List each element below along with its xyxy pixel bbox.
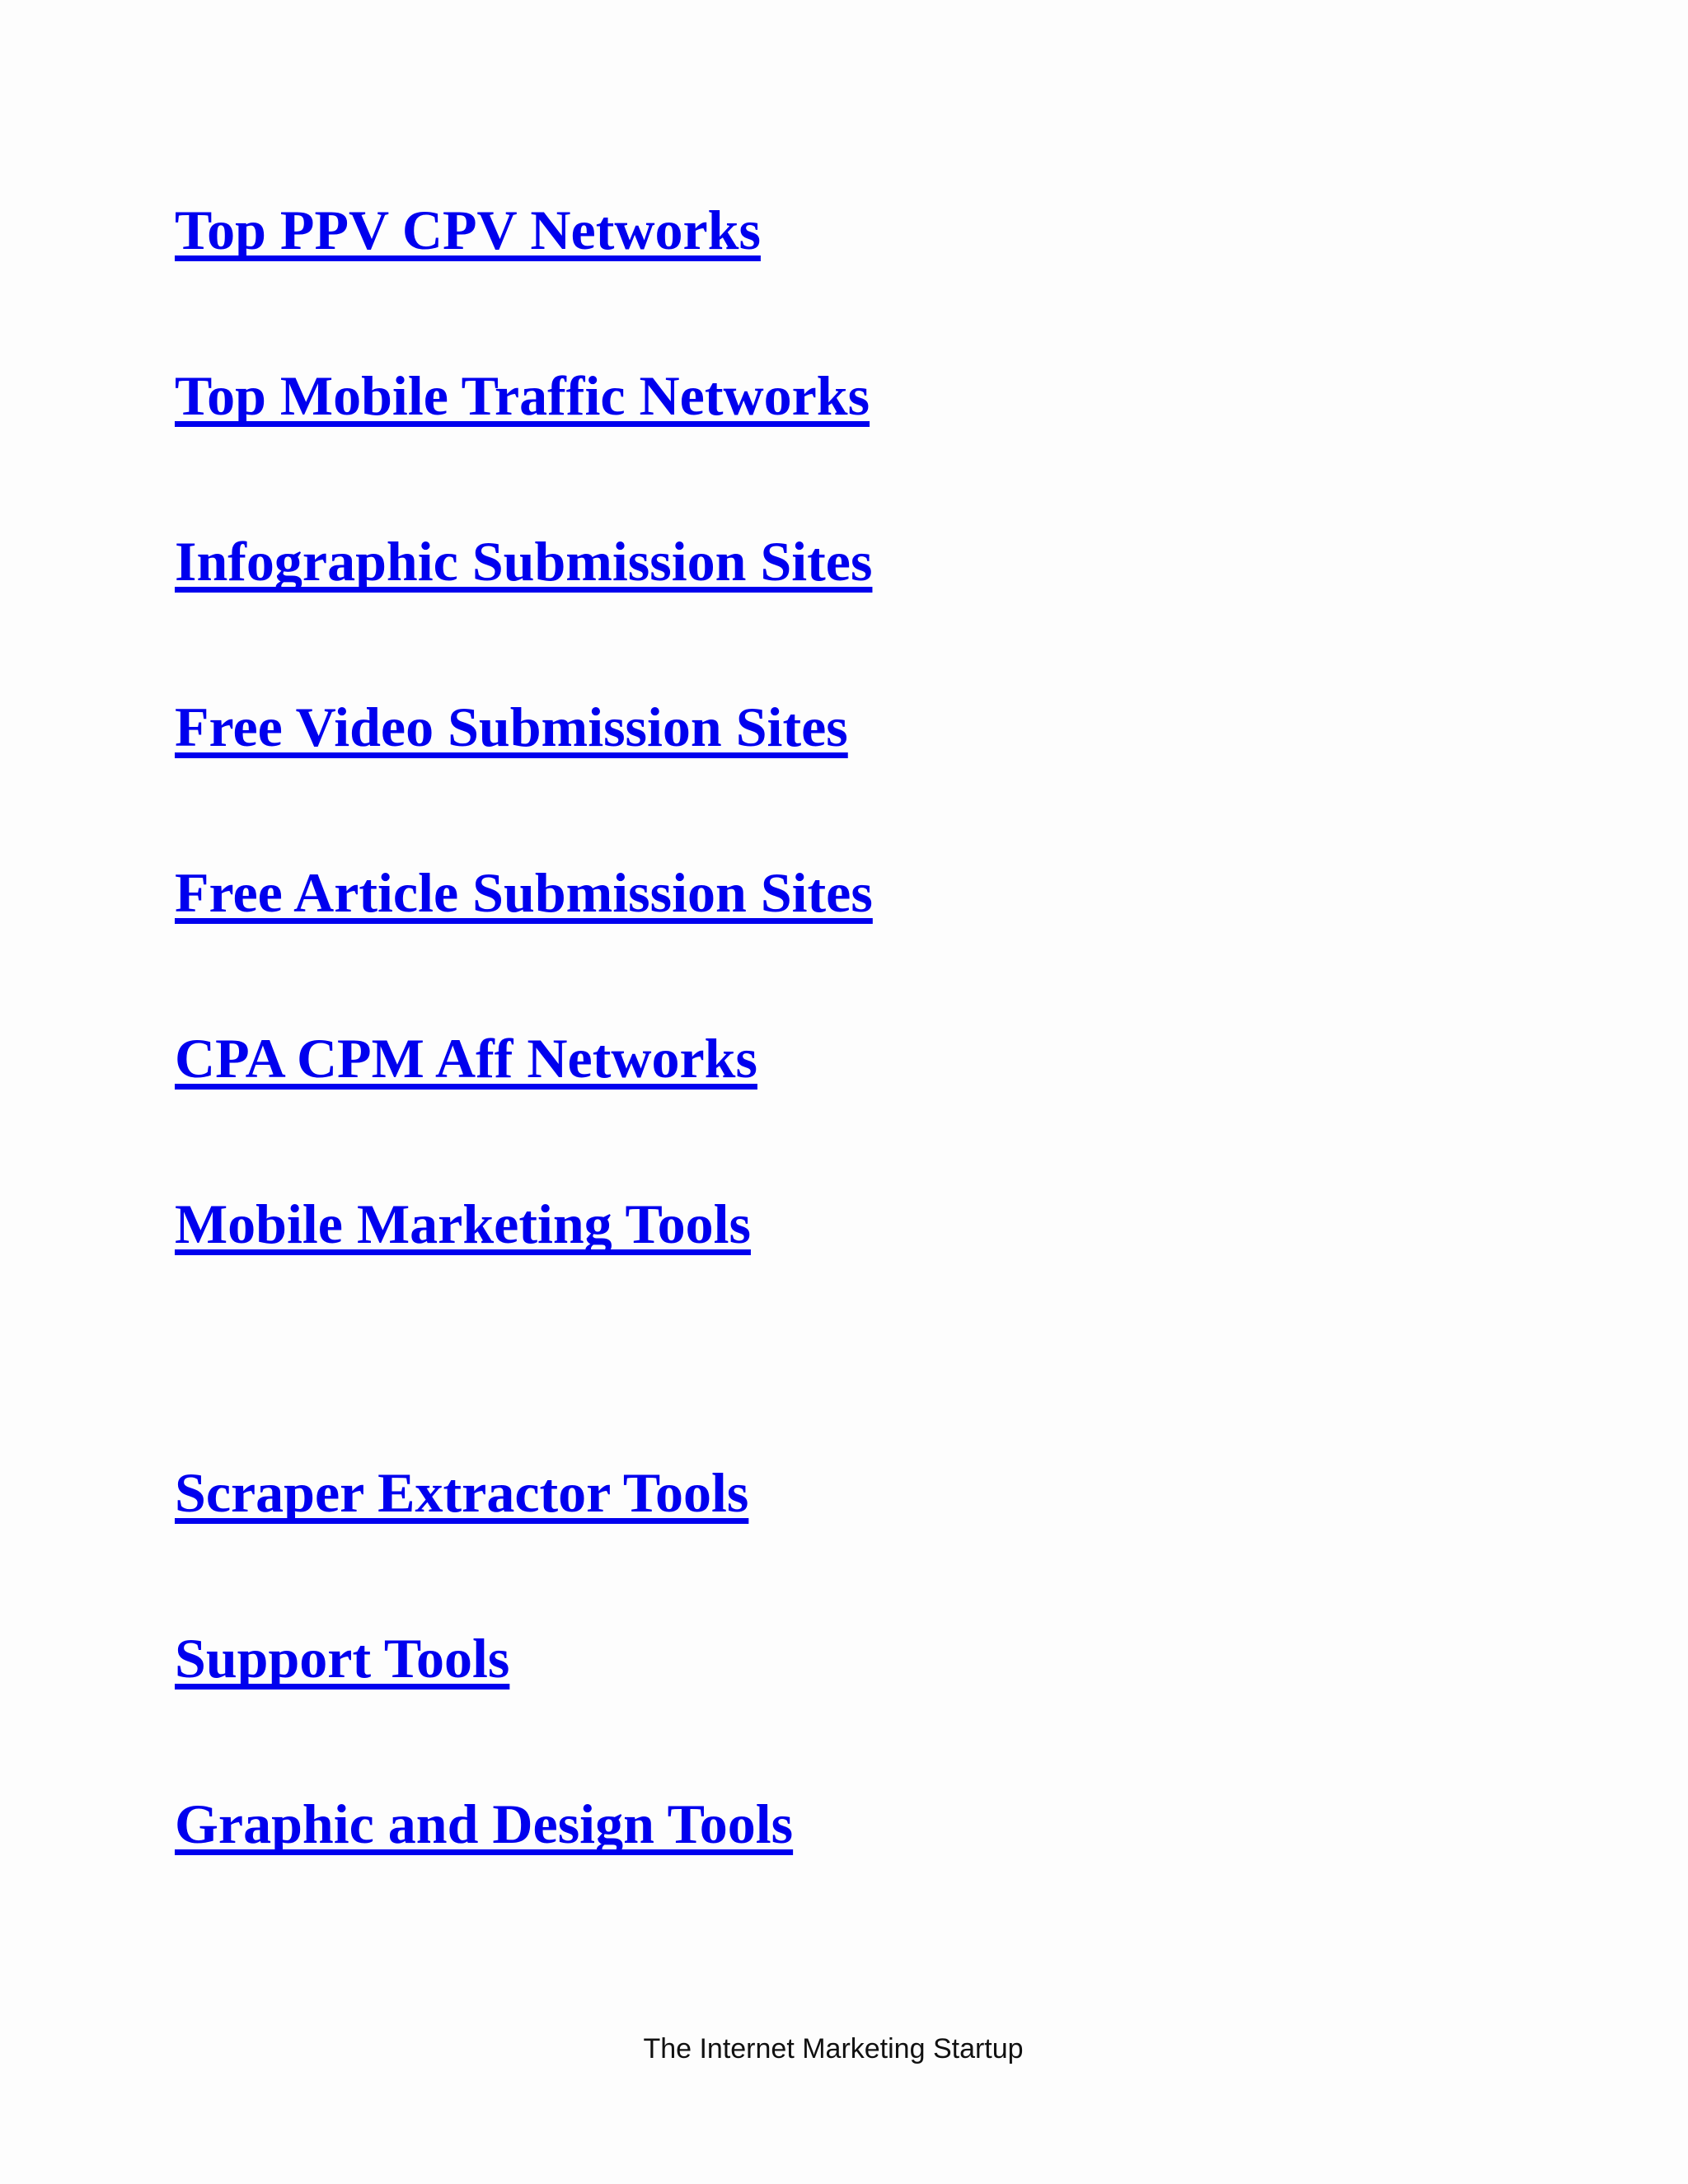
link: Support Tools: Support Tools — [175, 1627, 509, 1690]
link: Free Article Submission Sites: Free Article Submission Sites — [175, 861, 873, 924]
footer text: The Internet Marketing Startup — [643, 2033, 1024, 2064]
link: CPA CPM Aff Networks: CPA CPM Aff Networks — [175, 1027, 757, 1090]
link: Top Mobile Traffic Networks: Top Mobile Traffic Networks — [175, 364, 870, 427]
link: Infographic Submission Sites: Infographic Submission Sites — [175, 530, 872, 593]
link: Graphic and Design Tools: Graphic and Design Tools — [175, 1793, 793, 1855]
link: Free Video Submission Sites: Free Video Submission Sites — [175, 696, 848, 758]
link: Mobile Marketing Tools: Mobile Marketing Tools — [175, 1193, 751, 1255]
link: Scraper Extractor Tools: Scraper Extractor Tools — [175, 1461, 748, 1524]
link: Top PPV CPV Networks: Top PPV CPV Networks — [175, 199, 761, 261]
